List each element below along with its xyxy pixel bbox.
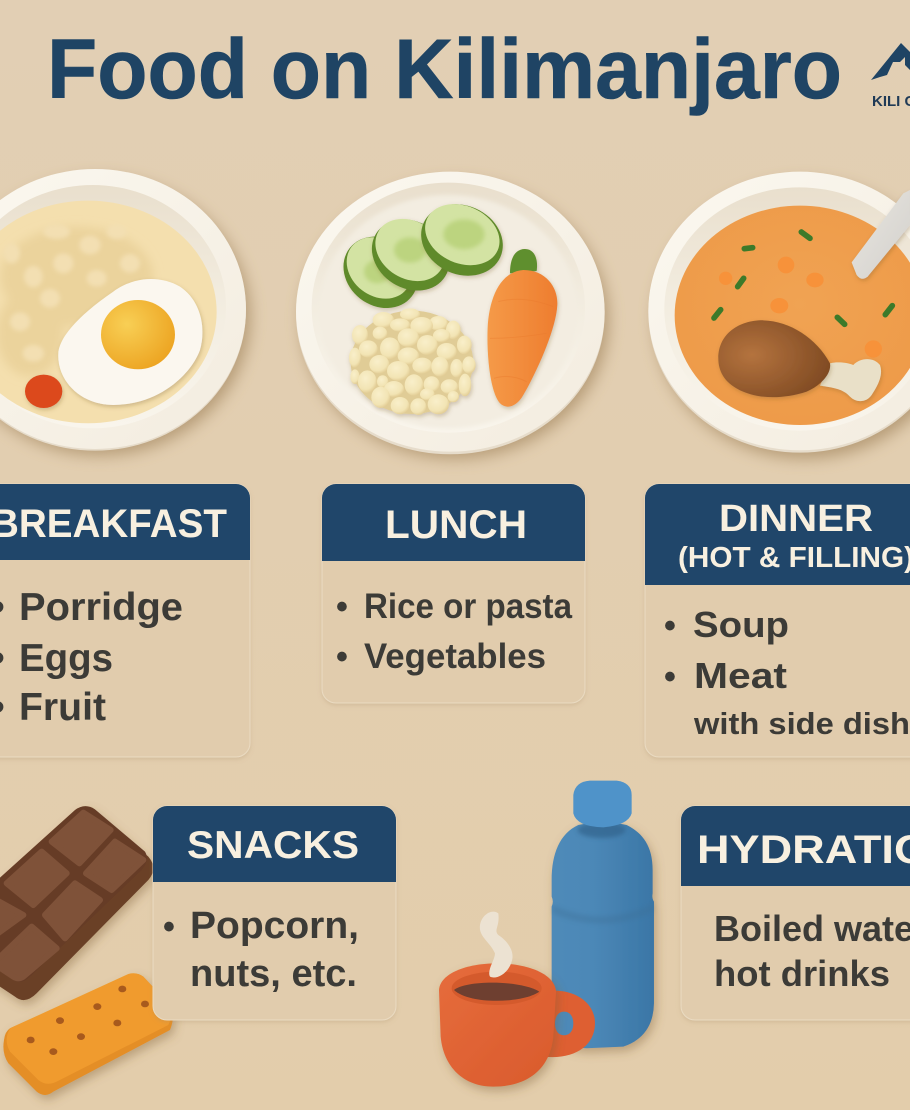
list: lunch xyxy=(336,587,573,676)
chocolate squares xyxy=(0,813,143,978)
panel: dinner xyxy=(645,484,910,757)
porridge highlights xyxy=(3,224,140,362)
heading: hydration: HYDRATIO xyxy=(697,828,910,872)
header band: snacks xyxy=(153,806,396,882)
text: hydration: hot drinks xyxy=(714,953,890,994)
list: lunch: • xyxy=(336,588,348,626)
text: hydration: Boiled wate xyxy=(714,908,910,949)
list: lunch: Rice or pasta xyxy=(364,587,573,626)
cucumber slice 3 xyxy=(410,192,514,288)
list: snacks: nuts, etc. xyxy=(190,953,357,995)
egg yolk xyxy=(101,300,175,369)
title: Food on Kilimanjaro xyxy=(47,22,842,116)
bottle body xyxy=(552,822,654,1048)
list: breakfast: Porridge xyxy=(19,586,183,629)
coffee xyxy=(454,983,539,1001)
steam xyxy=(480,912,513,978)
bowl rim xyxy=(0,170,246,451)
dinner bowl illustration xyxy=(648,172,910,458)
carrot bits xyxy=(719,257,882,358)
tomato xyxy=(25,375,62,408)
header band: lunch xyxy=(322,484,585,561)
mug handle xyxy=(543,991,595,1057)
panel: hydration xyxy=(681,806,910,1020)
panel: snacks xyxy=(153,806,396,1020)
list: dinner: with side dish xyxy=(693,706,910,741)
logo: Kili mountain xyxy=(871,43,910,110)
list: breakfast xyxy=(0,586,183,729)
egg white xyxy=(58,279,202,405)
list: dinner: Meat xyxy=(694,655,787,696)
bowl rim xyxy=(648,173,910,453)
chocolate body xyxy=(0,807,153,1000)
bottle groove xyxy=(553,903,653,924)
mug inner xyxy=(452,972,542,1005)
lunch plate illustration xyxy=(296,172,608,458)
plate well xyxy=(312,183,585,433)
cucumber slice 1 xyxy=(329,222,432,323)
list: dinner: Soup xyxy=(693,604,789,645)
list: snacks: Popcorn, xyxy=(190,905,359,947)
panel: breakfast xyxy=(0,484,250,757)
list: snacks xyxy=(163,905,359,995)
bottle cap xyxy=(573,781,632,827)
panel: lunch xyxy=(322,484,585,703)
cracker side xyxy=(3,974,173,1095)
herbs xyxy=(714,232,892,324)
plate rim xyxy=(296,173,605,454)
heading: dinner: DINNER xyxy=(719,498,873,540)
porridge xyxy=(0,201,217,423)
list: breakfast: Eggs xyxy=(19,637,113,680)
water bottle illustration xyxy=(552,781,654,1048)
list: snacks: • xyxy=(163,908,175,946)
mug illustration xyxy=(439,912,595,1087)
porridge texture xyxy=(0,227,153,377)
heading: lunch: LUNCH xyxy=(385,503,527,547)
chicken drumstick xyxy=(718,320,830,397)
bottle neck shadow xyxy=(578,822,626,838)
header band: hydration xyxy=(681,806,910,886)
list: dinner: • xyxy=(664,607,676,645)
soup xyxy=(675,206,910,425)
chicken bone xyxy=(820,359,881,401)
cracker illustration xyxy=(3,973,173,1095)
rice mound xyxy=(349,308,476,415)
heading: snacks: SNACKS xyxy=(187,824,359,867)
list: lunch: Vegetables xyxy=(364,637,546,676)
list: breakfast: Fruit xyxy=(19,686,106,729)
text: hydration xyxy=(714,908,910,994)
chocolate bar illustration xyxy=(0,806,153,1000)
cucumber slice 2 xyxy=(359,205,463,305)
header band: dinner xyxy=(645,484,910,585)
header band: breakfast xyxy=(0,484,250,560)
cracker holes xyxy=(27,986,149,1055)
list: dinner xyxy=(664,604,910,741)
carrot xyxy=(487,249,557,407)
heading: dinner xyxy=(678,498,910,574)
mug body xyxy=(439,963,556,1087)
heading: dinner: (HOT & FILLING) xyxy=(678,542,910,574)
chocolate face xyxy=(0,806,147,982)
cracker face xyxy=(7,973,171,1084)
breakfast bowl illustration xyxy=(0,169,250,455)
list: dinner: • xyxy=(664,658,676,696)
list: lunch: • xyxy=(336,638,348,676)
spoon xyxy=(852,190,910,279)
